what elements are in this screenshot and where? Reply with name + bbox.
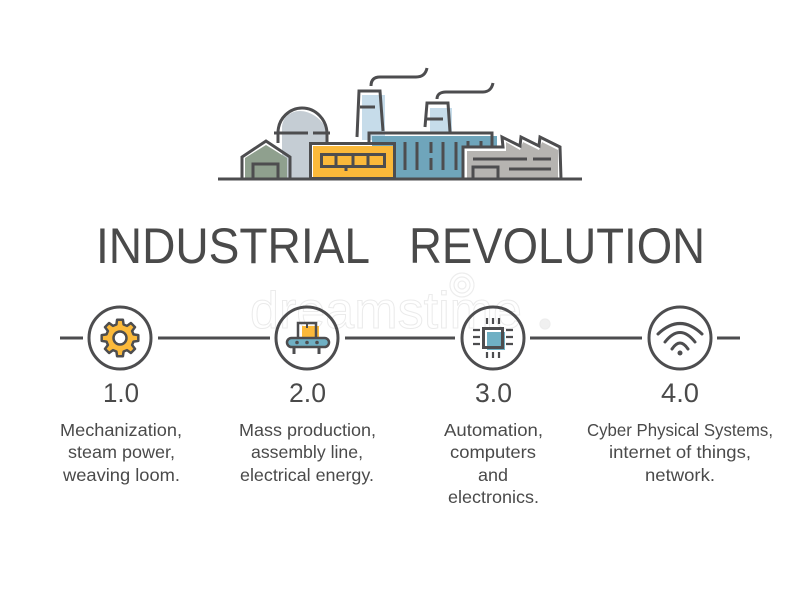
number: 1.0 [103, 378, 139, 408]
watermark: dreamstime [250, 282, 522, 340]
description: Mechanization, [60, 420, 182, 440]
step 1 [60, 307, 182, 485]
icon: wifi [649, 307, 711, 369]
description: Automation, [444, 420, 543, 440]
step 4 [587, 307, 773, 485]
description: computers [450, 442, 536, 462]
timeline connector [60, 336, 740, 340]
description: Cyber Physical Systems, [587, 420, 773, 440]
barn [242, 141, 290, 179]
smoke trail left [371, 68, 427, 86]
illustration: factory [218, 68, 582, 179]
blue building [369, 133, 497, 179]
yellow building [310, 144, 394, 179]
step 2 [239, 307, 376, 485]
description: network. [645, 465, 715, 485]
description: and [478, 465, 508, 485]
description [444, 420, 543, 507]
smoke trail right [437, 83, 493, 99]
description: internet of things, [609, 442, 751, 462]
grey building [463, 137, 561, 179]
icon: conveyor [276, 307, 338, 369]
title: REVOLUTION [409, 218, 705, 274]
number: 2.0 [289, 378, 326, 408]
tower left [357, 91, 385, 140]
tower right [425, 103, 452, 134]
dome [274, 108, 330, 179]
description: steam power, [68, 442, 175, 462]
ground line [218, 178, 582, 180]
title [96, 218, 705, 274]
icon: gear [89, 307, 151, 369]
title: INDUSTRIAL [96, 218, 370, 274]
icon: microchip [462, 307, 524, 369]
number: 4.0 [661, 378, 699, 408]
description: Mass production, [239, 420, 376, 440]
step 3 [444, 307, 543, 507]
number: 3.0 [475, 378, 512, 408]
description: weaving loom. [62, 465, 180, 485]
description: assembly line, [251, 442, 363, 462]
description [60, 420, 182, 485]
description: electrical energy. [240, 465, 374, 485]
description: electronics. [448, 487, 539, 507]
description [239, 420, 376, 485]
description [587, 420, 773, 485]
